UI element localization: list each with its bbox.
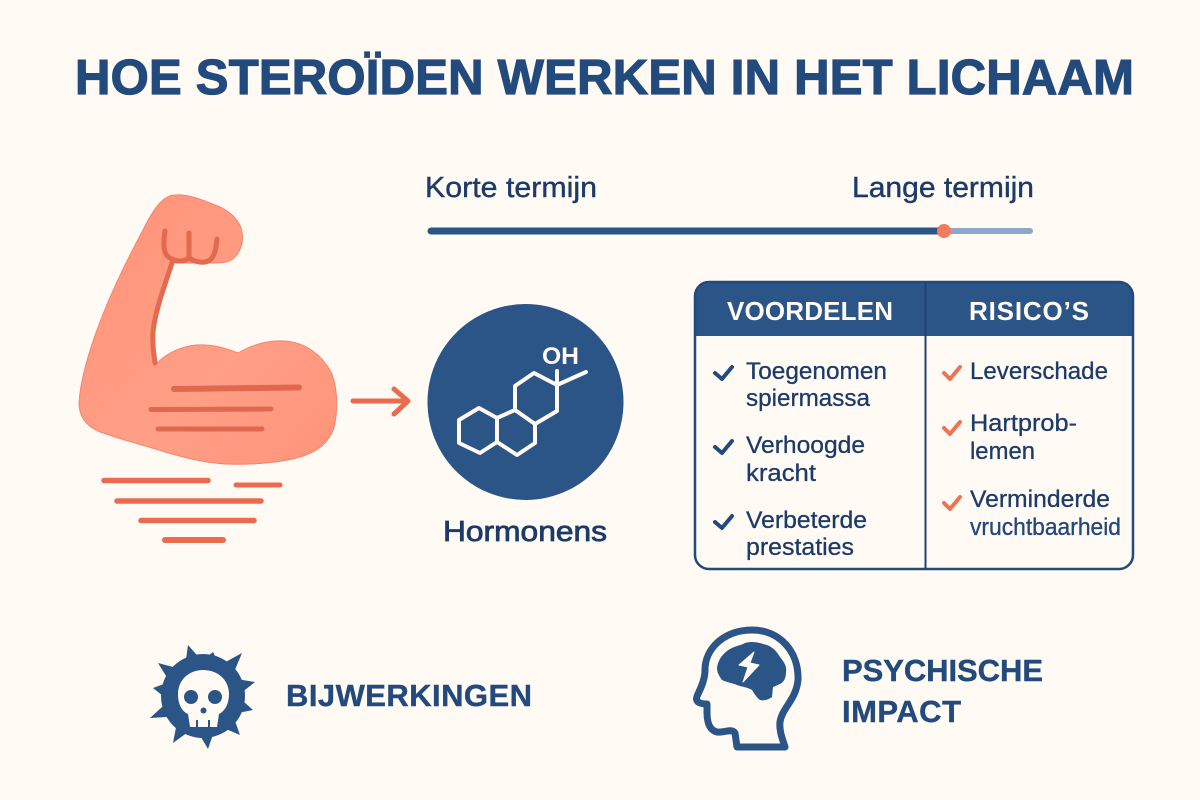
benefit list: Verhoogde	[746, 432, 865, 459]
icon: skull badge	[150, 645, 255, 749]
timeline track	[431, 228, 1030, 234]
benefit list: spiermassa	[746, 385, 871, 412]
icon: flexed arm	[79, 195, 337, 464]
column heading: benefits: VOORDELEN	[727, 296, 893, 326]
muscle lines	[151, 388, 299, 429]
timeline progress	[431, 228, 944, 234]
benefit list: Toegenomen	[746, 358, 887, 385]
benefit list: prestaties	[746, 534, 854, 561]
risk list: Leverschade	[970, 358, 1108, 385]
risk checkmarks	[944, 367, 960, 509]
column heading: risks: RISICO’S	[969, 296, 1089, 326]
icon: molecule in circle	[428, 304, 624, 500]
benefit list: kracht	[746, 460, 816, 487]
label: psychological impact	[842, 653, 1043, 729]
label: psychological impact: IMPACT	[842, 694, 961, 729]
timeline label: short term: Korte termijn	[425, 172, 597, 204]
timeline	[425, 172, 1034, 238]
title: HOE STEROÏDEN WERKEN IN HET LICHAAM	[75, 51, 1134, 105]
risk list: lemen	[970, 438, 1035, 465]
timeline label: long term: Lange termijn	[852, 172, 1034, 204]
risk list: Verminderde	[970, 486, 1110, 513]
label: side effects: BIJWERKINGEN	[286, 678, 532, 713]
timeline marker	[937, 224, 951, 238]
icon: molecule in circle: OH	[542, 343, 579, 370]
motion lines under arm	[104, 480, 280, 540]
risk list: vruchtbaarheid	[970, 514, 1121, 541]
risk list: Hartprob-	[970, 410, 1077, 437]
panel: benefits and risks table	[695, 282, 1133, 569]
benefit checkmarks	[715, 367, 732, 528]
risk list	[970, 358, 1121, 541]
icon: head with brain and lightning	[696, 630, 798, 747]
arrow: arm to hormones	[353, 389, 408, 414]
benefit list: Verbeterde	[746, 507, 867, 534]
label: psychological impact: PSYCHISCHE	[842, 653, 1043, 688]
benefit list	[746, 358, 887, 561]
label: hormones: Hormonens	[443, 516, 607, 548]
hand and forearm crease	[153, 231, 217, 363]
